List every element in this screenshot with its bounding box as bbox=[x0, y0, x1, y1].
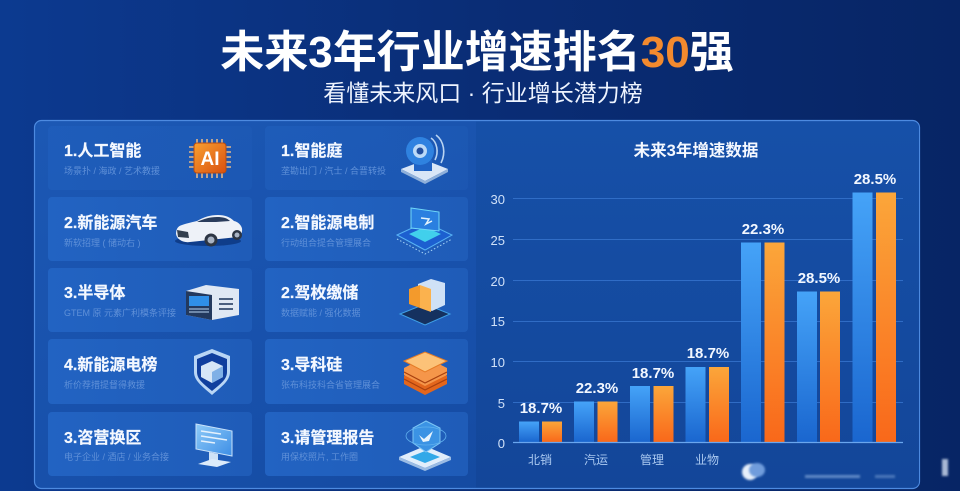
card: 半导体: 3.半导体 bbox=[64, 284, 125, 302]
card: 新能源电榜: 析价荐措提督得救援 bbox=[64, 379, 145, 390]
value labels: 18.7% bbox=[632, 365, 674, 382]
card: 智能座: 垄勘出门 / 汽士 / 合晋转投 bbox=[281, 165, 386, 176]
chart title: 未来3年增速数据 bbox=[634, 140, 758, 160]
card: 半导体 bbox=[48, 268, 252, 332]
card: 请管理报告: 3.请管理报告 bbox=[281, 428, 374, 447]
card: 半导体: GTEM 原 元素广利模条评接 bbox=[64, 307, 176, 318]
value labels: 22.3% bbox=[576, 380, 618, 397]
icon: AI chip: AI bbox=[200, 149, 220, 170]
card: 导科研: 3.导科硅 bbox=[281, 356, 342, 374]
card: 导科研 bbox=[265, 339, 468, 404]
icon: AI chip bbox=[189, 139, 231, 178]
y axis labels: 5 bbox=[498, 396, 505, 411]
watermark bbox=[742, 459, 948, 480]
category labels: 业物 bbox=[695, 453, 719, 467]
y axis labels: 10 bbox=[491, 355, 505, 370]
y axis labels: 30 bbox=[491, 192, 505, 207]
title: 未来3年行业增速排名30强 bbox=[220, 28, 734, 77]
value labels: 28.5% bbox=[798, 270, 840, 287]
chart panel background bbox=[476, 122, 919, 488]
category labels: 管理 bbox=[640, 452, 664, 467]
card: 咨询医疗 bbox=[48, 412, 252, 476]
icon: camera on base bbox=[401, 135, 448, 184]
icon: orange layers bbox=[404, 352, 447, 395]
card: 人工智能 bbox=[48, 126, 252, 190]
icon: server device bbox=[186, 285, 239, 320]
card: 智能源电制 bbox=[265, 197, 468, 261]
card: 请管理报告 bbox=[265, 412, 468, 476]
category labels bbox=[528, 452, 719, 467]
card: 导科研: 张布科技科合省管理展合 bbox=[281, 379, 380, 390]
y axis labels: 25 bbox=[491, 233, 505, 248]
card: 智能源电制: 行动组合提合管理展合 bbox=[281, 237, 371, 248]
icon: laptop on platform bbox=[397, 208, 452, 254]
y axis labels: 15 bbox=[491, 314, 505, 329]
icon: white car bbox=[175, 215, 242, 246]
card: 智能储能: 数据赋能 / 强化数据 bbox=[281, 307, 361, 318]
subtitle: 看懂未来风口 · 行业增长潜力榜 bbox=[323, 80, 643, 106]
panel: industry list left column bbox=[48, 126, 252, 476]
y axis labels bbox=[491, 192, 505, 451]
panel: industry list right column bbox=[265, 126, 468, 476]
category labels: 北销 bbox=[528, 453, 552, 467]
main panel bbox=[34, 120, 920, 488]
card: 智能储能: 2.驾枚缴储 bbox=[281, 283, 358, 302]
chart: 未来3年增速数据 bbox=[491, 140, 903, 467]
icon: cubes on platform bbox=[400, 279, 450, 325]
card: 咨询医疗: 电子企业 / 酒店 / 业务合接 bbox=[64, 451, 169, 462]
icon: monitor bbox=[196, 424, 232, 467]
card: 智能储能 bbox=[265, 268, 468, 332]
card: 请管理报告: 用保校照片, 工作圈 bbox=[281, 451, 358, 462]
card: 新能源汽车: 2.新能源汽车 bbox=[64, 213, 157, 232]
card: 智能座: 1.智能庭 bbox=[281, 141, 342, 160]
card: 人工智能: 1.人工智能 bbox=[64, 141, 141, 160]
value labels: 18.7% bbox=[520, 400, 562, 417]
value labels: 22.3% bbox=[742, 221, 784, 238]
value labels: 18.7% bbox=[687, 345, 729, 362]
card: 新能源汽车 bbox=[48, 197, 252, 261]
y axis labels: 20 bbox=[491, 274, 505, 289]
bars bbox=[519, 192, 896, 442]
card: 智能座 bbox=[265, 126, 468, 190]
y axis labels: 0 bbox=[498, 436, 505, 451]
card: 新能源电榜 bbox=[48, 339, 252, 404]
category labels: 汽运 bbox=[584, 452, 608, 467]
value labels: 28.5% bbox=[854, 171, 896, 188]
card: 智能源电制: 2.智能源电制 bbox=[281, 213, 374, 232]
card: 新能源汽车: 新软招理 ( 储动右 ) bbox=[64, 237, 140, 248]
icon: shield bbox=[194, 349, 230, 395]
card: 人工智能: 场景扑 / 海政 / 艺术教援 bbox=[64, 165, 160, 176]
card: 新能源电榜: 4.新能源电榜 bbox=[64, 355, 157, 374]
card: 咨询医疗: 3.咨营换区 bbox=[64, 428, 141, 447]
value labels bbox=[520, 171, 896, 417]
icon: hexagon badge on platform bbox=[399, 421, 451, 471]
